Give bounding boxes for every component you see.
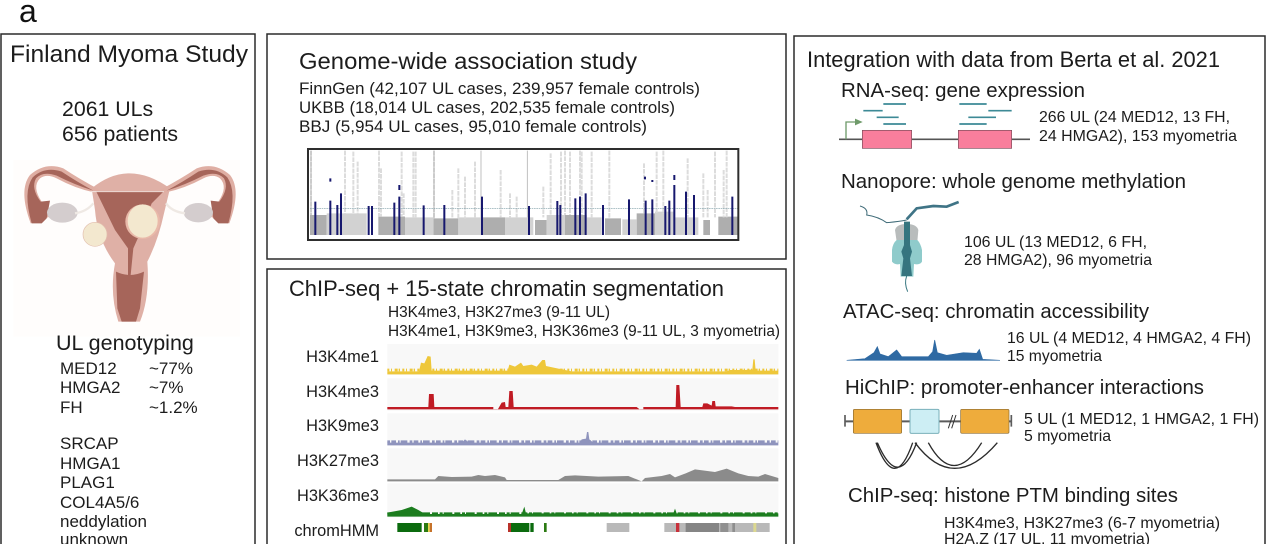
driver mutation frequencies: ~7% — [149, 378, 184, 397]
section: RNA-seq: RNA-seq: gene expression — [841, 80, 1085, 102]
driver mutation frequencies: ~77% — [149, 359, 193, 378]
track labels: H3K36me3 — [297, 487, 379, 505]
track labels: H3K27me3 — [297, 452, 379, 470]
section: Nanopore: Nanopore: whole genome methylation — [841, 171, 1186, 193]
track: H3K9me3 — [387, 432, 778, 445]
section: ChIP-seq histone PTM: ChIP-seq: histone PTM binding sites — [848, 485, 1178, 507]
other subtypes list: SRCAP — [60, 434, 119, 453]
track: H3K27me3 — [387, 469, 778, 481]
cohort counts: 2061 ULs — [62, 97, 153, 121]
cohort list: BBJ (5,954 UL cases, 95,010 female controls) — [299, 117, 647, 136]
section: ATAC-seq — [843, 301, 1251, 365]
sample description — [388, 304, 780, 340]
track: H3K4me3 — [387, 385, 778, 410]
sample description: H3K4me1, H3K9me3, H3K36me3 (9-11 UL, 3 myometria) — [388, 323, 780, 340]
cohort list: UKBB (18,014 UL cases, 202,535 female controls) — [299, 98, 675, 117]
heading: integration: Integration with data from Berta et al. 2021 — [807, 47, 1220, 72]
cohort counts — [62, 97, 178, 146]
section: RNA-seq: 266 UL (24 MED12, 13 FH, — [1039, 109, 1230, 126]
heading: Finland Myoma Study: Finland Myoma Study — [10, 41, 249, 68]
section: ChIP-seq histone PTM — [848, 485, 1220, 544]
icon: uterus with fibroids — [13, 160, 240, 337]
track labels — [294, 348, 379, 540]
track: chromHMM segments — [397, 523, 770, 532]
driver mutation frequencies: ~1.2% — [149, 398, 198, 417]
other subtypes list: COL4A5/6 — [60, 493, 139, 512]
panel: Integration with data — [794, 36, 1265, 544]
section: ChIP-seq histone PTM: H3K4me3, H3K27me3 (6-7 myometria) — [944, 515, 1220, 532]
heading: ChIP-seq: ChIP-seq + 15-state chromatin segmentation — [289, 276, 724, 301]
section: RNA-seq: 24 HMGA2), 153 myometria — [1039, 128, 1237, 145]
sample description: H3K4me3, H3K27me3 (9-11 UL) — [388, 304, 610, 321]
track: H3K36me3 — [387, 507, 778, 517]
icon: nanopore — [860, 202, 959, 292]
driver mutation frequencies — [60, 359, 198, 417]
section: HiChIP: 5 myometria — [1024, 428, 1111, 445]
section: Nanopore: 28 HMGA2), 96 myometria — [964, 252, 1152, 269]
cohort list — [299, 79, 700, 136]
section: ATAC-seq: 15 myometria — [1007, 348, 1102, 365]
icon: promoter-enhancer loops — [845, 409, 1012, 468]
driver mutation frequencies: FH — [60, 398, 83, 417]
chart: signal tracks — [387, 344, 778, 532]
heading: GWAS: Genome-wide association study — [299, 48, 637, 74]
cohort list: FinnGen (42,107 UL cases, 239,957 female controls) — [299, 79, 700, 98]
other subtypes list: HMGA1 — [60, 454, 120, 473]
driver mutation frequencies: HMGA2 — [60, 378, 120, 397]
icon: ATAC peaks — [847, 340, 1000, 360]
other subtypes list: neddylation — [60, 512, 147, 531]
other subtypes list — [60, 434, 147, 544]
section: ATAC-seq: 16 UL (4 MED12, 4 HMGA2, 4 FH) — [1007, 330, 1251, 347]
cohort counts: 656 patients — [62, 122, 178, 146]
panel: ChIP-seq + 15-state chromatin segmentation — [267, 269, 786, 544]
track labels: chromHMM — [294, 522, 379, 540]
driver mutation frequencies: MED12 — [60, 359, 117, 378]
section: Nanopore — [841, 171, 1186, 292]
track: H3K4me1 — [387, 356, 778, 374]
section: HiChIP — [845, 377, 1259, 468]
section: RNA-seq — [839, 80, 1237, 148]
track labels: H3K9me3 — [306, 417, 379, 435]
section: HiChIP: HiChIP: promoter-enhancer interactions — [845, 377, 1204, 399]
section: Nanopore: 106 UL (13 MED12, 6 FH, — [964, 234, 1147, 251]
track labels: H3K4me1 — [306, 348, 379, 366]
icon: gene model with reads — [839, 104, 1030, 148]
other subtypes list: PLAG1 — [60, 473, 115, 492]
section: HiChIP: 5 UL (1 MED12, 1 HMGA2, 1 FH) — [1024, 411, 1259, 428]
chart: Manhattan plot — [308, 149, 738, 240]
heading: UL genotyping: UL genotyping — [56, 331, 194, 355]
track labels: H3K4me3 — [306, 383, 379, 401]
panel: Finland Myoma Study — [1, 34, 255, 544]
panel: Genome-wide association study — [267, 34, 786, 259]
section: ATAC-seq: ATAC-seq: chromatin accessibility — [843, 301, 1150, 323]
